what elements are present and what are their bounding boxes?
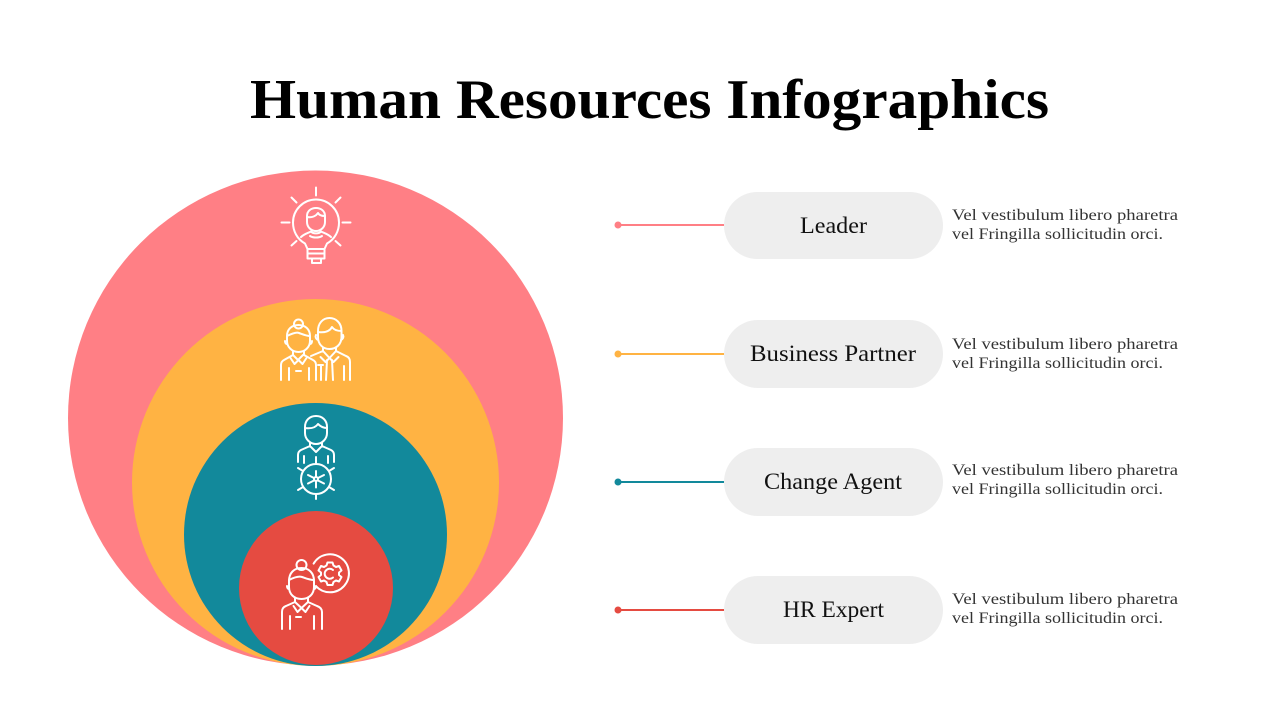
row: Change Agent bbox=[614, 448, 1178, 516]
pill bbox=[724, 576, 943, 644]
connector line bbox=[618, 609, 724, 611]
connector dot bbox=[614, 478, 622, 486]
connector line bbox=[618, 353, 724, 355]
description: vel Fringilla sollicitudin orci. bbox=[952, 355, 1163, 372]
icon: woman with gear bbox=[282, 554, 349, 629]
description: Vel vestibulum libero pharetra bbox=[952, 336, 1178, 353]
description: Vel vestibulum libero pharetra bbox=[952, 462, 1178, 479]
description: Vel vestibulum libero pharetra bbox=[952, 207, 1178, 224]
pill bbox=[724, 320, 943, 388]
pill label: Business Partner bbox=[750, 341, 916, 366]
description: Vel vestibulum libero pharetra bbox=[952, 591, 1178, 608]
pill label: Change Agent bbox=[764, 469, 903, 494]
description: vel Fringilla sollicitudin orci. bbox=[952, 610, 1163, 627]
connector line bbox=[618, 481, 724, 483]
icon: person at ship wheel bbox=[298, 416, 334, 499]
pill bbox=[724, 192, 943, 259]
icon: two colleagues bbox=[281, 318, 350, 380]
description: vel Fringilla sollicitudin orci. bbox=[952, 226, 1163, 243]
circle: leader bbox=[68, 170, 563, 666]
circle: business partner bbox=[132, 299, 499, 666]
connector dot bbox=[614, 222, 622, 228]
pill label: HR Expert bbox=[783, 597, 885, 622]
connector dot bbox=[614, 606, 622, 614]
connector dot bbox=[614, 350, 622, 358]
row: Leader bbox=[614, 192, 1178, 259]
nested circles diagram bbox=[68, 170, 563, 666]
pill bbox=[724, 448, 943, 516]
description: vel Fringilla sollicitudin orci. bbox=[952, 481, 1163, 498]
icon: person in light bulb bbox=[282, 188, 350, 263]
pill label: Leader bbox=[800, 213, 867, 238]
row: HR Expert bbox=[614, 576, 1178, 644]
circle: change agent bbox=[184, 403, 447, 666]
title: Human Resources Infographics bbox=[250, 69, 1049, 131]
row: Business Partner bbox=[614, 320, 1178, 388]
connector line bbox=[618, 224, 724, 226]
circle: HR expert bbox=[239, 511, 393, 665]
